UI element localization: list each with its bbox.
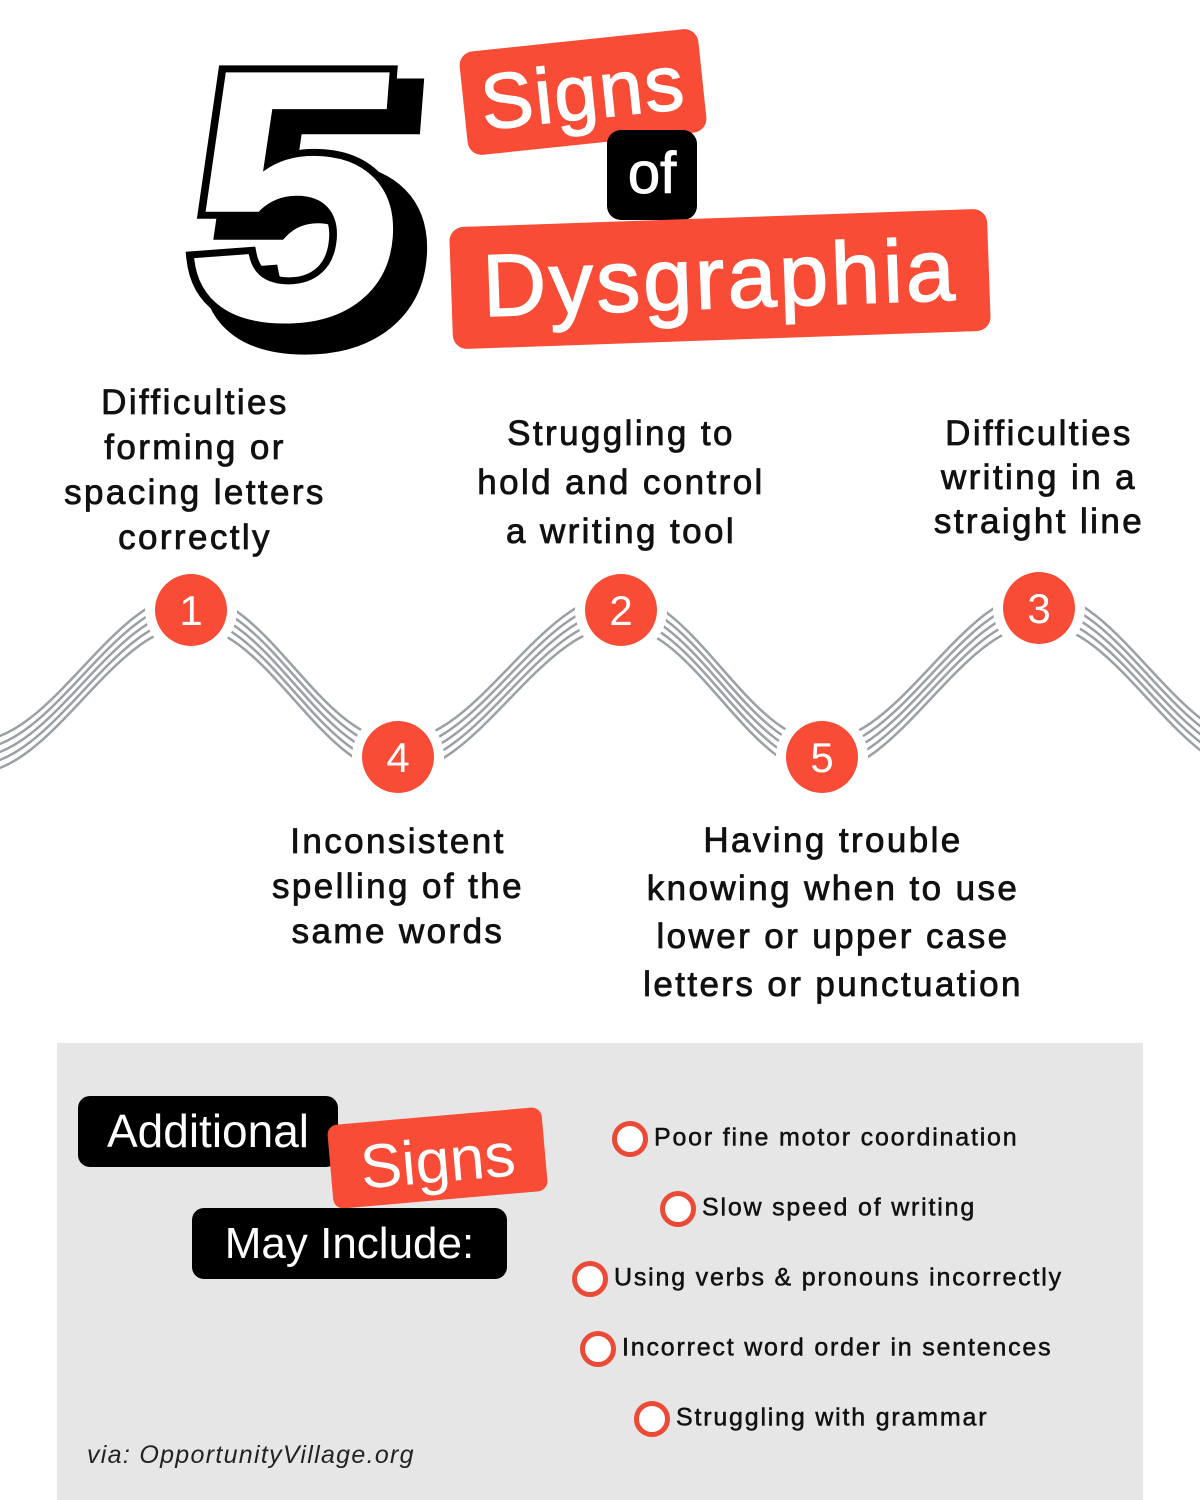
wave with numbered circles: 3: [1027, 585, 1051, 632]
bullet 2: [660, 1191, 976, 1227]
bullet 5: [634, 1401, 988, 1437]
title: of: [607, 130, 697, 220]
bullet 3: Using verbs & pronouns incorrectly: [614, 1264, 1063, 1292]
sign 5 text: Having trouble: [703, 821, 963, 860]
heading: May Include: [192, 1208, 507, 1279]
panel: additional signs: [57, 1043, 1143, 1500]
sign 3 text: Difficulties: [945, 414, 1133, 453]
bullet 4: Incorrect word order in sentences: [622, 1334, 1052, 1362]
bullet list: [572, 1121, 1063, 1437]
sign 4 text: Inconsistent: [290, 822, 506, 861]
sign 4 text: spelling of the: [272, 867, 524, 906]
sign 2 text: hold and control: [477, 463, 765, 502]
wave with numbered circles: 5: [810, 734, 834, 781]
sign 2 text: Struggling to: [507, 414, 735, 453]
sign 5 text: letters or punctuation: [643, 965, 1023, 1004]
wave with numbered circles: 4: [386, 734, 410, 781]
bullet 2: Slow speed of writing: [702, 1194, 976, 1222]
heading: Additional: Additional: [107, 1105, 309, 1157]
sign 4 text: same words: [292, 912, 504, 951]
sign 5 text: lower or upper case: [656, 917, 1009, 956]
title: Dysgraphia: Dysgraphia: [481, 220, 959, 335]
sign 5 text: [643, 821, 1023, 1004]
heading: Additional: [78, 1096, 338, 1167]
heading: May Include: May Include:: [225, 1219, 474, 1268]
sign 1 text: [64, 383, 326, 557]
bullet 5: Struggling with grammar: [676, 1404, 988, 1432]
source: via: OpportunityVillage.org: [87, 1441, 415, 1469]
heading: Signs: Signs: [358, 1120, 518, 1203]
sign 1 text: spacing letters: [64, 473, 326, 512]
sign 5 text: knowing when to use: [647, 869, 1019, 908]
sign 3 text: straight line: [934, 502, 1144, 541]
bullet 1: [612, 1121, 1018, 1157]
sign 3 text: [934, 414, 1144, 541]
bullet 1: Poor fine motor coordination: [654, 1124, 1018, 1152]
sign 4 text: [272, 822, 524, 951]
wave with numbered circles: 1: [179, 587, 203, 634]
sign 3 text: writing in a: [941, 458, 1137, 497]
title: of: of: [628, 141, 676, 206]
sign 1 text: forming or: [104, 428, 286, 467]
sign 2 text: a writing tool: [506, 512, 736, 551]
sign 1 text: correctly: [118, 518, 272, 557]
heading: Signs: [327, 1107, 548, 1209]
wave with numbered circles: 2: [609, 587, 633, 634]
sign 1 text: Difficulties: [101, 383, 289, 422]
sign 2 text: [477, 414, 765, 551]
title: Signs: Signs: [476, 38, 690, 146]
